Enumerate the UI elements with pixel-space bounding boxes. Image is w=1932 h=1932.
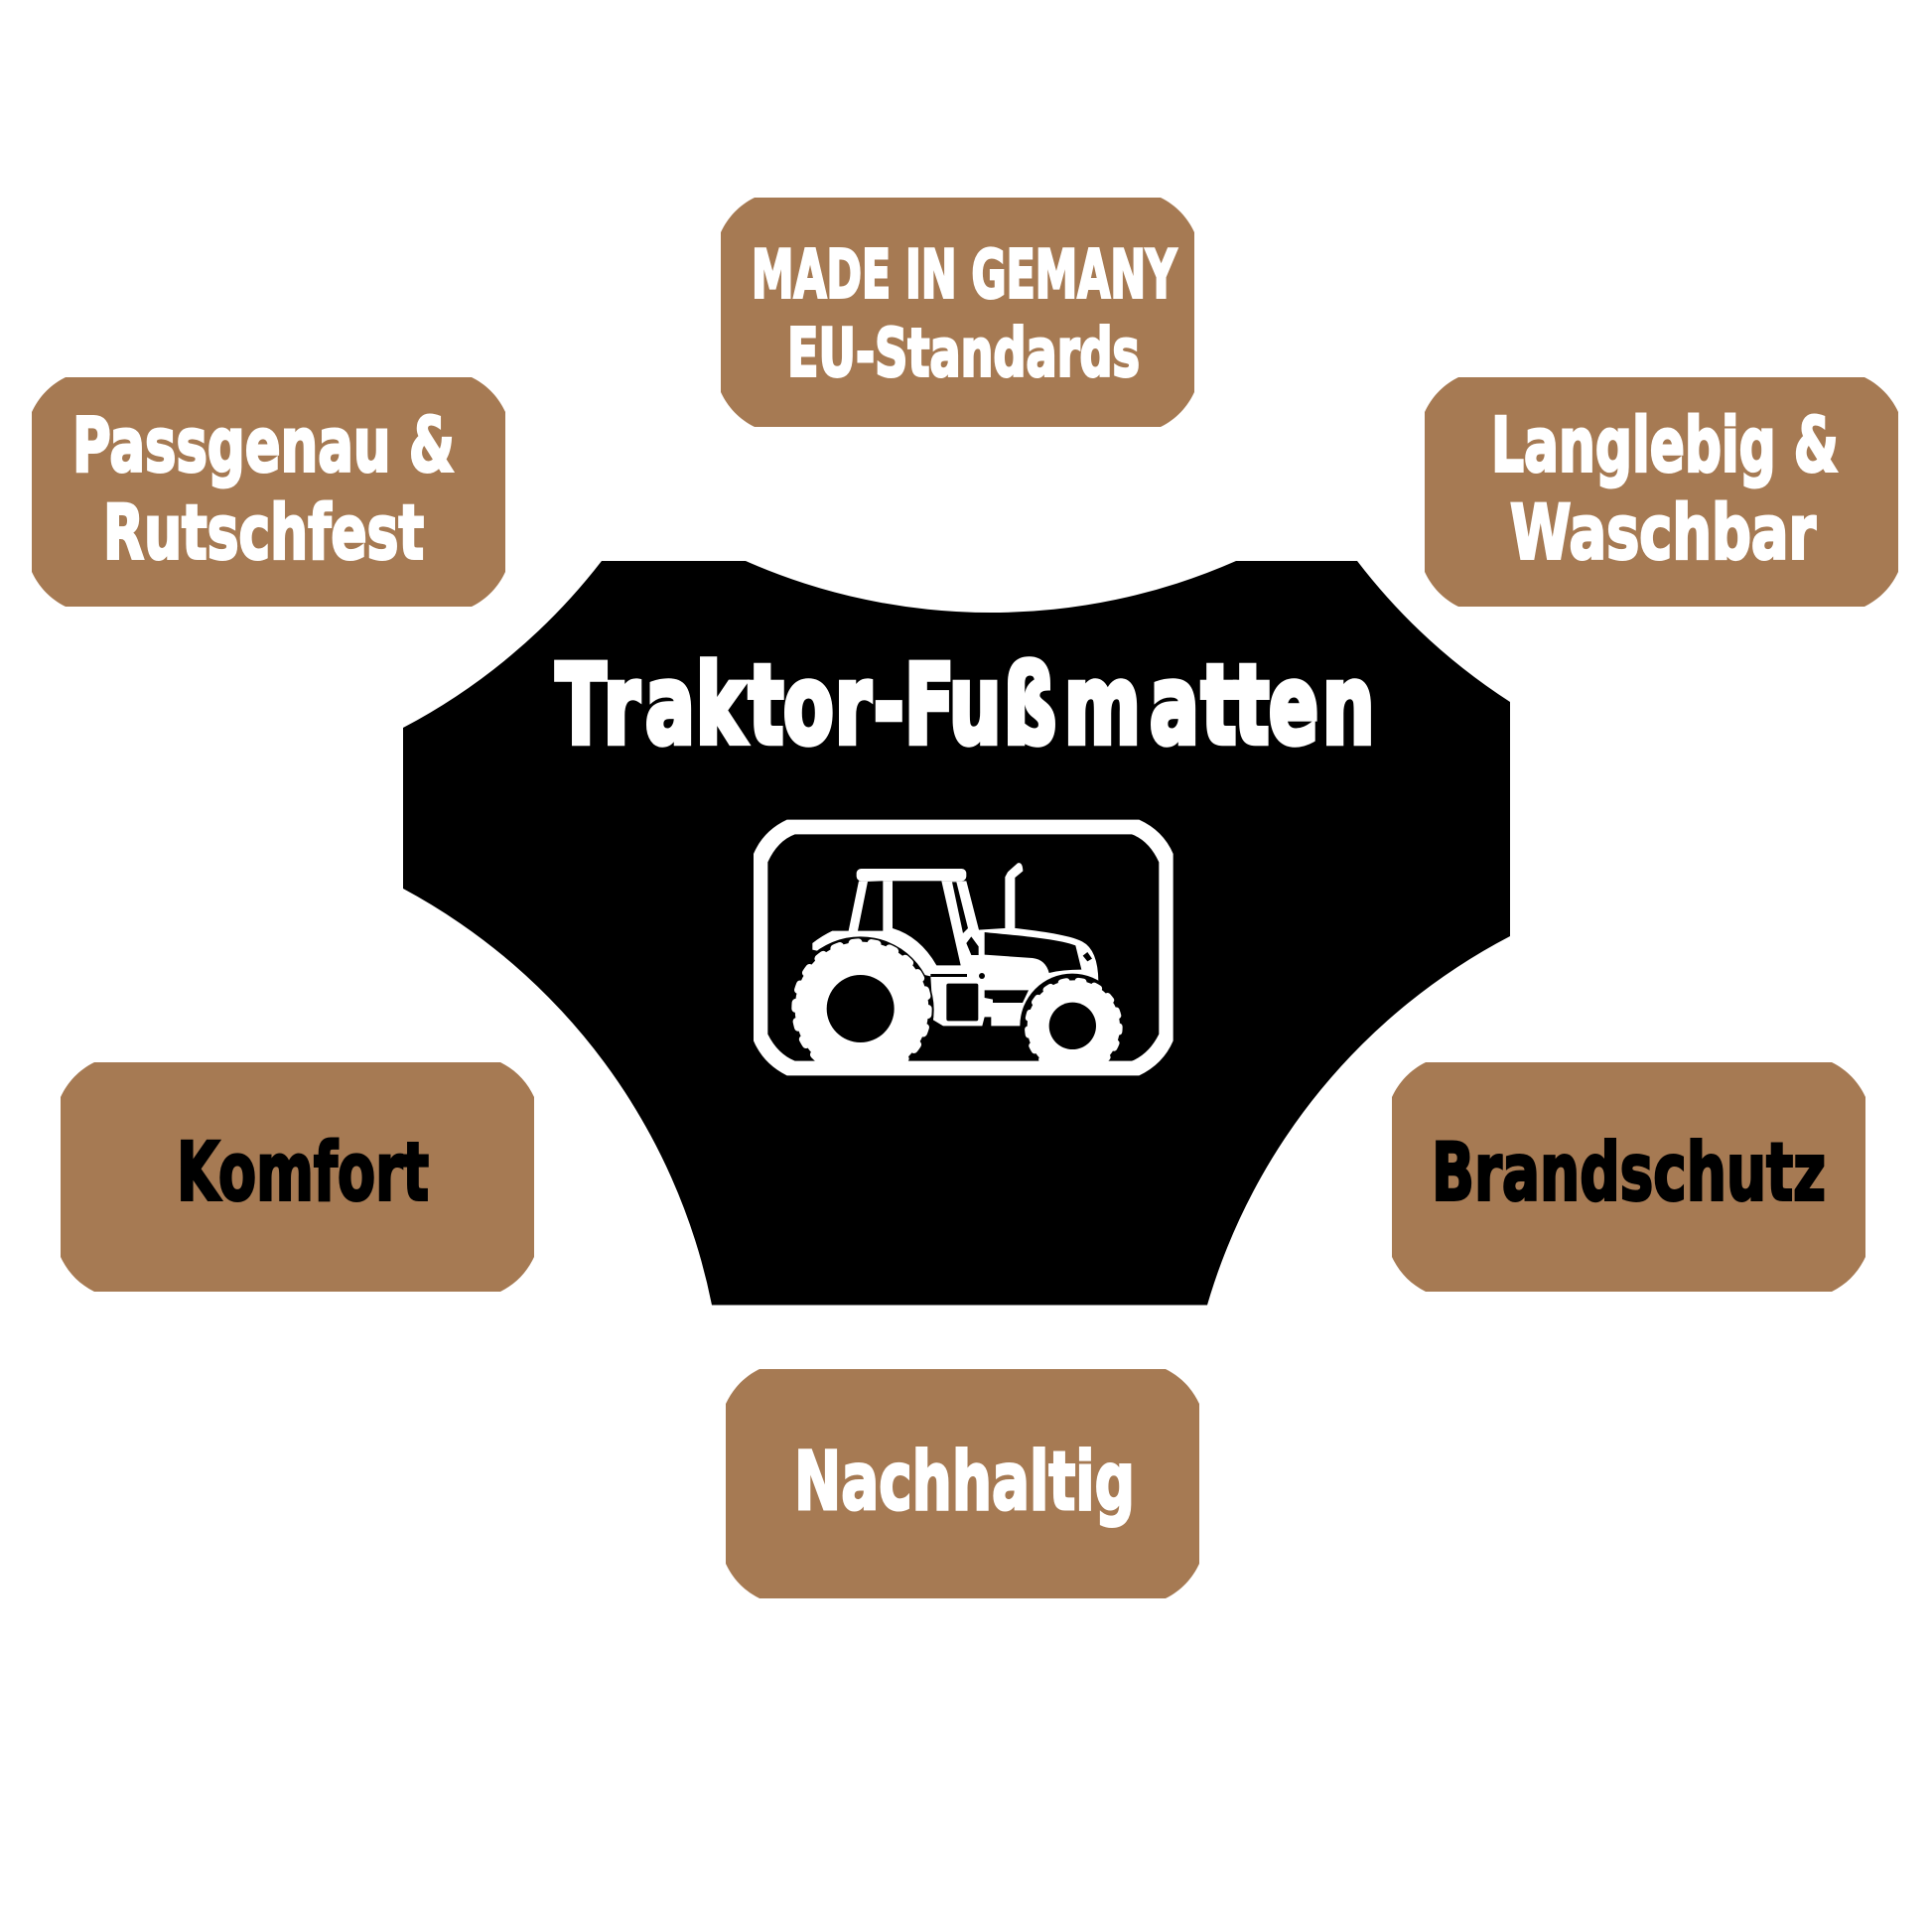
panel: Komfort xyxy=(61,1062,534,1292)
body cut-outs xyxy=(979,973,985,979)
label line 2: EU-Standards xyxy=(787,314,1140,391)
panel: Langlebig xyxy=(1425,377,1898,607)
wheels xyxy=(795,942,1120,1075)
bonnet panel xyxy=(985,932,1081,973)
icon: tractor in rounded frame xyxy=(754,820,1173,1083)
label line 1: Passgenau & xyxy=(72,401,455,488)
label: Nachhaltig xyxy=(794,1436,1135,1529)
title: Traktor-Fußmatten xyxy=(556,642,1374,769)
tractor body xyxy=(812,863,1098,1026)
label: Komfort xyxy=(177,1126,429,1219)
panel: Nachhaltig xyxy=(726,1369,1199,1598)
label line 2: Rutschfest xyxy=(103,488,424,576)
wheel clearance xyxy=(787,881,1125,1083)
label line 1: MADE IN GEMANY xyxy=(752,236,1177,314)
panel: Passgenau xyxy=(32,377,505,607)
central black panel xyxy=(403,561,1510,1305)
cab windows xyxy=(858,881,883,931)
label line 2: Waschbar xyxy=(1510,488,1816,576)
frame xyxy=(754,820,1173,1075)
panel: Brandschutz xyxy=(1392,1062,1865,1292)
panel: Made in Germany xyxy=(721,198,1194,427)
